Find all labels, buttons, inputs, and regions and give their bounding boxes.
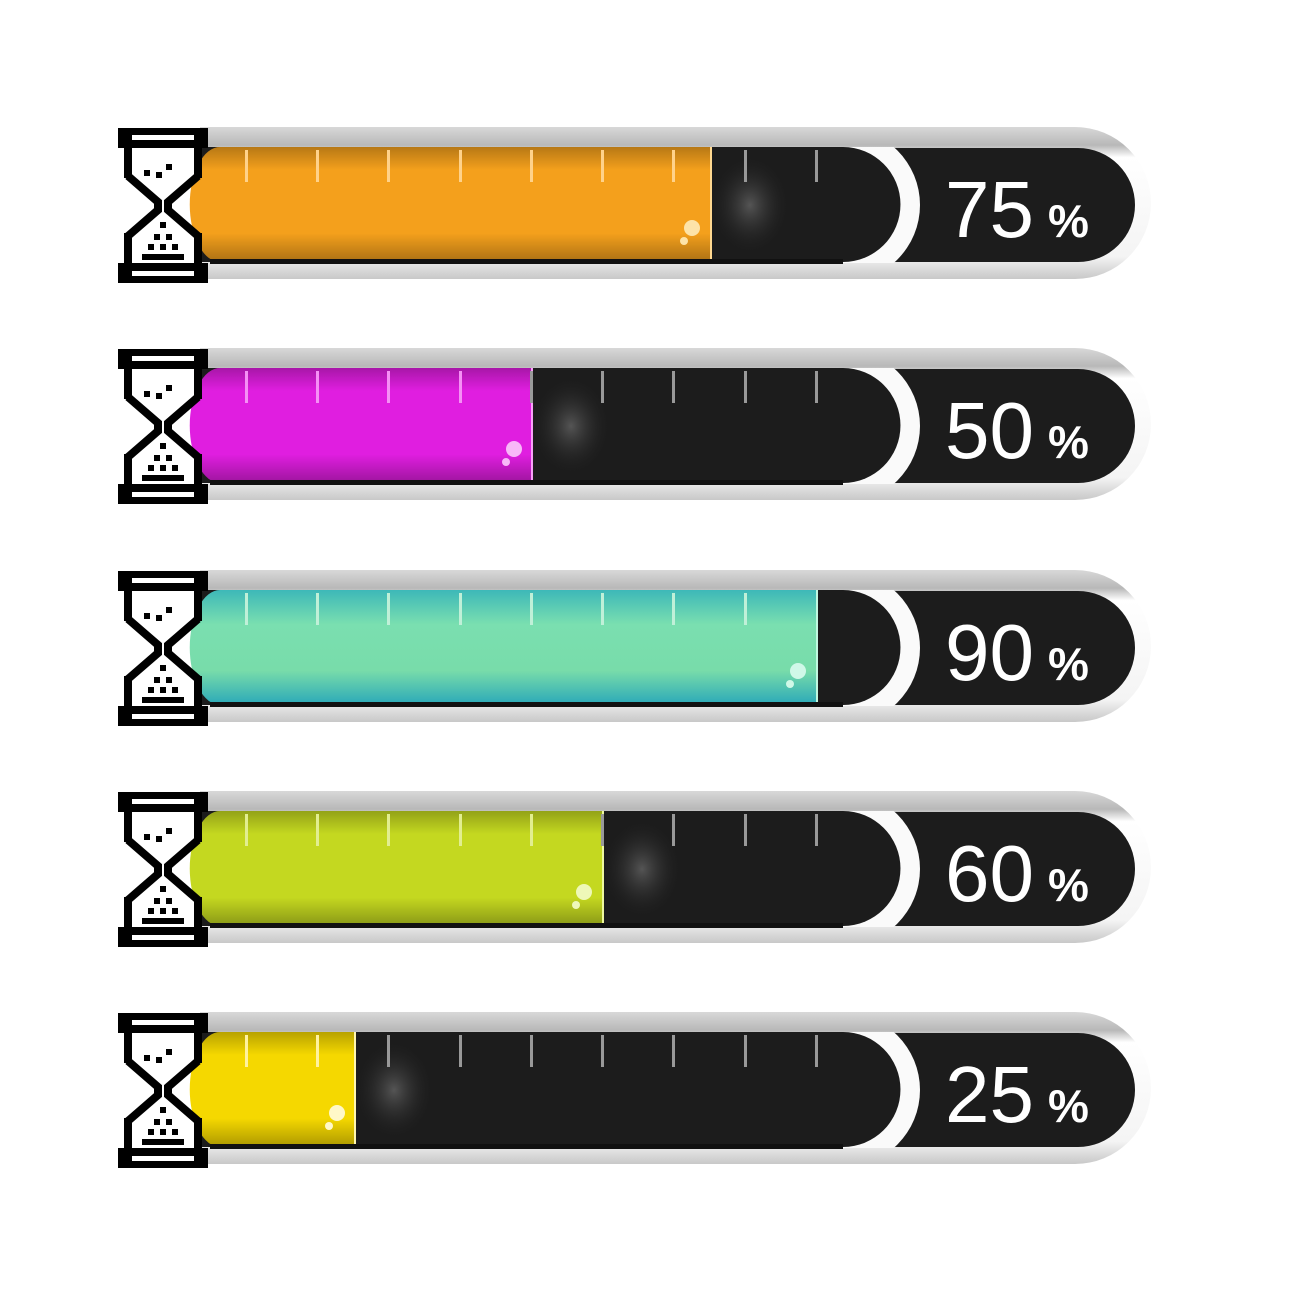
icon: hourglass	[118, 792, 208, 947]
icon: hourglass	[118, 571, 208, 726]
bar 4: 60%	[118, 791, 1151, 947]
bar 5: 25%	[118, 1012, 1151, 1168]
label: 60 %: 60 %	[945, 829, 1089, 918]
bar 2: 50%	[118, 348, 1151, 504]
bar 3: 90%	[118, 570, 1151, 726]
label: 25 %: 25 %	[945, 1050, 1089, 1139]
icon: hourglass	[118, 128, 208, 283]
bar 1: 75%	[118, 127, 1151, 283]
label: 50 %: 50 %	[945, 386, 1089, 475]
icon: hourglass	[118, 1013, 208, 1168]
icon: hourglass	[118, 349, 208, 504]
label: 75 %: 75 %	[945, 165, 1089, 254]
label: 90 %: 90 %	[945, 608, 1089, 697]
